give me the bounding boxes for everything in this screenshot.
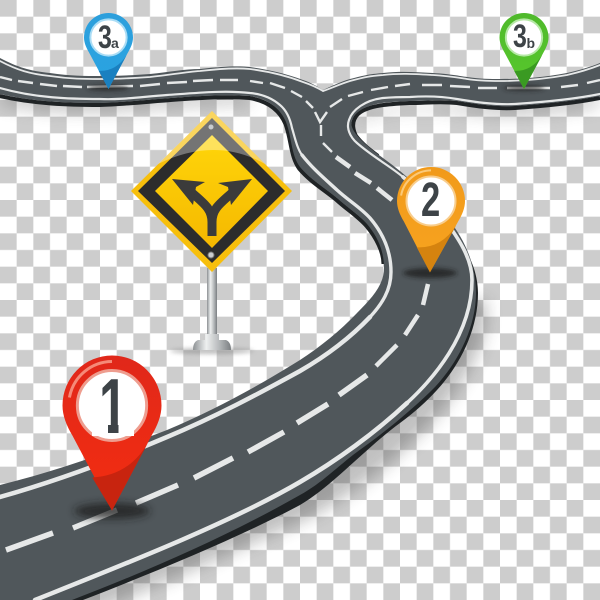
road sign xyxy=(131,111,292,354)
sign screws xyxy=(208,124,214,258)
pin 3b: green xyxy=(500,13,548,91)
pin shadow xyxy=(87,85,129,91)
pin shadow xyxy=(403,268,457,278)
pin 2: orange xyxy=(397,167,465,278)
pin body xyxy=(84,13,133,89)
pin 3a: blue xyxy=(84,13,133,91)
sign yellow centre xyxy=(155,135,268,248)
road dark kerb, lower edge xyxy=(50,255,478,600)
numeral foot mask xyxy=(92,424,134,436)
pin label: 3 xyxy=(98,20,112,56)
road centre dashes xyxy=(0,77,600,550)
sign pole base xyxy=(193,334,231,350)
pin label: 1 xyxy=(99,362,127,450)
sign black band xyxy=(138,118,285,263)
icon: fork arrows xyxy=(172,179,252,236)
pin 3b: green: b xyxy=(526,35,535,51)
pin label: 3 xyxy=(513,19,527,55)
pin shadow xyxy=(74,503,150,519)
pin body xyxy=(62,356,162,510)
sign pole xyxy=(207,268,217,334)
pin 3a: blue: a xyxy=(111,35,119,51)
pin 1: red xyxy=(62,356,162,519)
sign ground shadow xyxy=(170,348,254,354)
road dark kerb, right branch underside xyxy=(353,98,600,156)
road dark kerb, upper bends xyxy=(0,96,384,264)
pin shadow xyxy=(503,85,545,91)
pin body xyxy=(397,167,465,272)
pin body xyxy=(500,13,548,89)
sign gloss xyxy=(158,111,265,164)
pin label: 2 xyxy=(421,172,440,226)
sign yellow diamond xyxy=(131,111,292,272)
